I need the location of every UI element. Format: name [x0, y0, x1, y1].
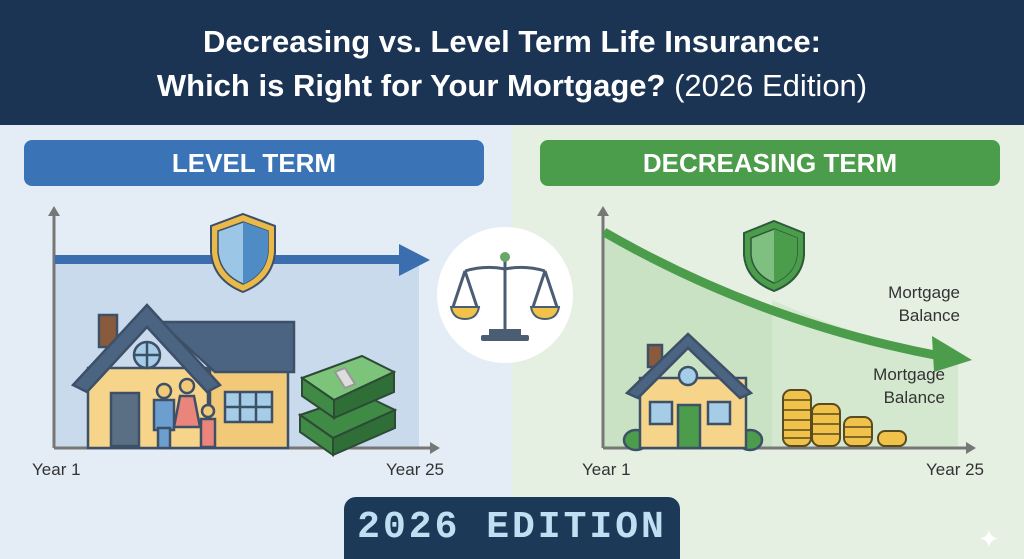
label: year 25 right: Year 25: [926, 460, 984, 479]
icon: green shield: [744, 221, 804, 291]
chart: level term: [48, 206, 440, 457]
icon: shield: [211, 214, 275, 292]
heading: level term: [24, 140, 484, 186]
chart: decreasing term: [597, 206, 976, 454]
label: mortgage balance lower: Balance: [884, 388, 945, 407]
arrow: level coverage: [55, 244, 430, 276]
label: mortgage balance upper: Mortgage: [888, 283, 960, 302]
title: Decreasing vs. Level Term Life Insurance:: [203, 24, 821, 59]
header: [0, 0, 1024, 125]
label: year 25 left: Year 25: [386, 460, 444, 479]
icon: sparkle: ✦: [978, 524, 1000, 554]
title: Which is Right for Your Mortgage? (2026 Edition): [157, 68, 867, 103]
left background: [0, 125, 512, 559]
label: year 1 left: Year 1: [32, 460, 81, 479]
title: [156, 24, 867, 103]
icon: balance scale: [437, 227, 573, 363]
heading: level term: LEVEL TERM: [172, 148, 336, 178]
heading: decreasing term: [540, 140, 1000, 186]
label: mortgage balance lower: [873, 365, 945, 407]
label: mortgage balance lower: Mortgage: [873, 365, 945, 384]
label: mortgage balance upper: [888, 283, 960, 325]
heading: decreasing term: DECREASING TERM: [643, 148, 897, 178]
icon: small house: [624, 334, 762, 450]
arrow: decreasing coverage: [604, 232, 972, 372]
icon: cash stack: [300, 356, 395, 455]
icon: house with family: [73, 305, 294, 448]
badge: 2026 edition: 2026 EDITION: [357, 506, 667, 549]
label: mortgage balance upper: Balance: [899, 306, 960, 325]
right background: [512, 125, 1024, 559]
icon: coin stacks: [783, 390, 906, 446]
badge: 2026 edition: [344, 497, 680, 559]
label: year 1 right: Year 1: [582, 460, 631, 479]
